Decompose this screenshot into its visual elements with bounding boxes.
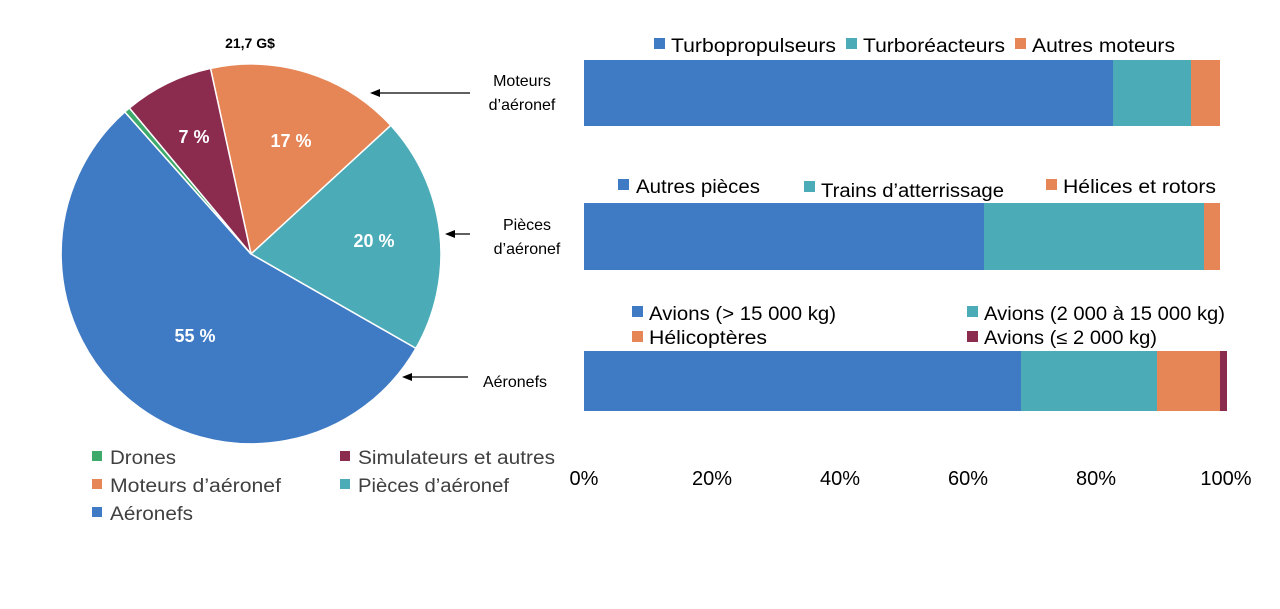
x axis labels: 100%: [1200, 468, 1252, 490]
bar 3: Aéronefs: [584, 351, 1227, 411]
bar 2: Pièces: [584, 203, 1220, 270]
x axis labels: 40%: [820, 468, 860, 490]
pie labels: [174, 127, 395, 346]
slice: Simulateurs et autres 7%: [129, 68, 251, 254]
bar 1: Moteurs: [584, 60, 1220, 126]
row labels: Moteurs: [493, 73, 551, 90]
row labels: d’aéronef: [494, 241, 561, 258]
legend bar 3: Avions (> 15 000 kg): [649, 304, 836, 325]
pie legend: Drones: [110, 448, 176, 469]
pie chart: [61, 64, 441, 444]
x axis labels: 80%: [1076, 468, 1116, 490]
slice: Pièces d'aéronef 20%: [251, 125, 441, 348]
legend bar 1: Turbopropulseurs: [671, 36, 836, 57]
pie legend: Pièces d’aéronef: [358, 476, 510, 497]
pie labels: 17 %: [270, 131, 312, 151]
x axis labels: 60%: [948, 468, 988, 490]
pie legend: Moteurs d’aéronef: [110, 476, 282, 497]
pie labels: 20 %: [353, 231, 395, 251]
legend bar 3: Hélicoptères: [649, 328, 767, 349]
legend bar 2: Trains d’atterrissage: [821, 181, 1004, 202]
pie labels: 7 %: [178, 127, 210, 147]
row labels: [483, 73, 561, 391]
x axis labels: [570, 468, 1252, 490]
pie legend: Simulateurs et autres: [358, 448, 555, 469]
legend bar 3: Avions (≤ 2 000 kg): [984, 328, 1157, 349]
legend bar 2: Autres pièces: [636, 177, 760, 198]
legend bar 2: [618, 177, 1216, 202]
row labels: d’aéronef: [489, 97, 556, 114]
total label: 21,7 G$: [225, 35, 275, 51]
row labels: Pièces: [503, 217, 551, 234]
pie labels: 55 %: [174, 326, 216, 346]
x axis labels: 20%: [692, 468, 732, 490]
slice: Drones: [125, 108, 251, 254]
legend bar 3: Avions (2 000 à 15 000 kg): [984, 304, 1225, 325]
pie legend: [92, 448, 555, 525]
legend bar 1: [654, 36, 1175, 57]
legend bar 1: Autres moteurs: [1032, 36, 1175, 57]
slice: Aéronefs 55%: [61, 112, 416, 444]
arrows: [370, 89, 470, 381]
row labels: Aéronefs: [483, 374, 547, 391]
legend bar 2: Hélices et rotors: [1063, 177, 1216, 198]
legend bar 3: [632, 304, 1225, 349]
pie legend: Aéronefs: [110, 504, 193, 525]
legend bar 1: Turboréacteurs: [863, 36, 1005, 57]
slice: Moteurs d'aéronef 17%: [210, 64, 391, 254]
x axis labels: 0%: [570, 468, 599, 490]
